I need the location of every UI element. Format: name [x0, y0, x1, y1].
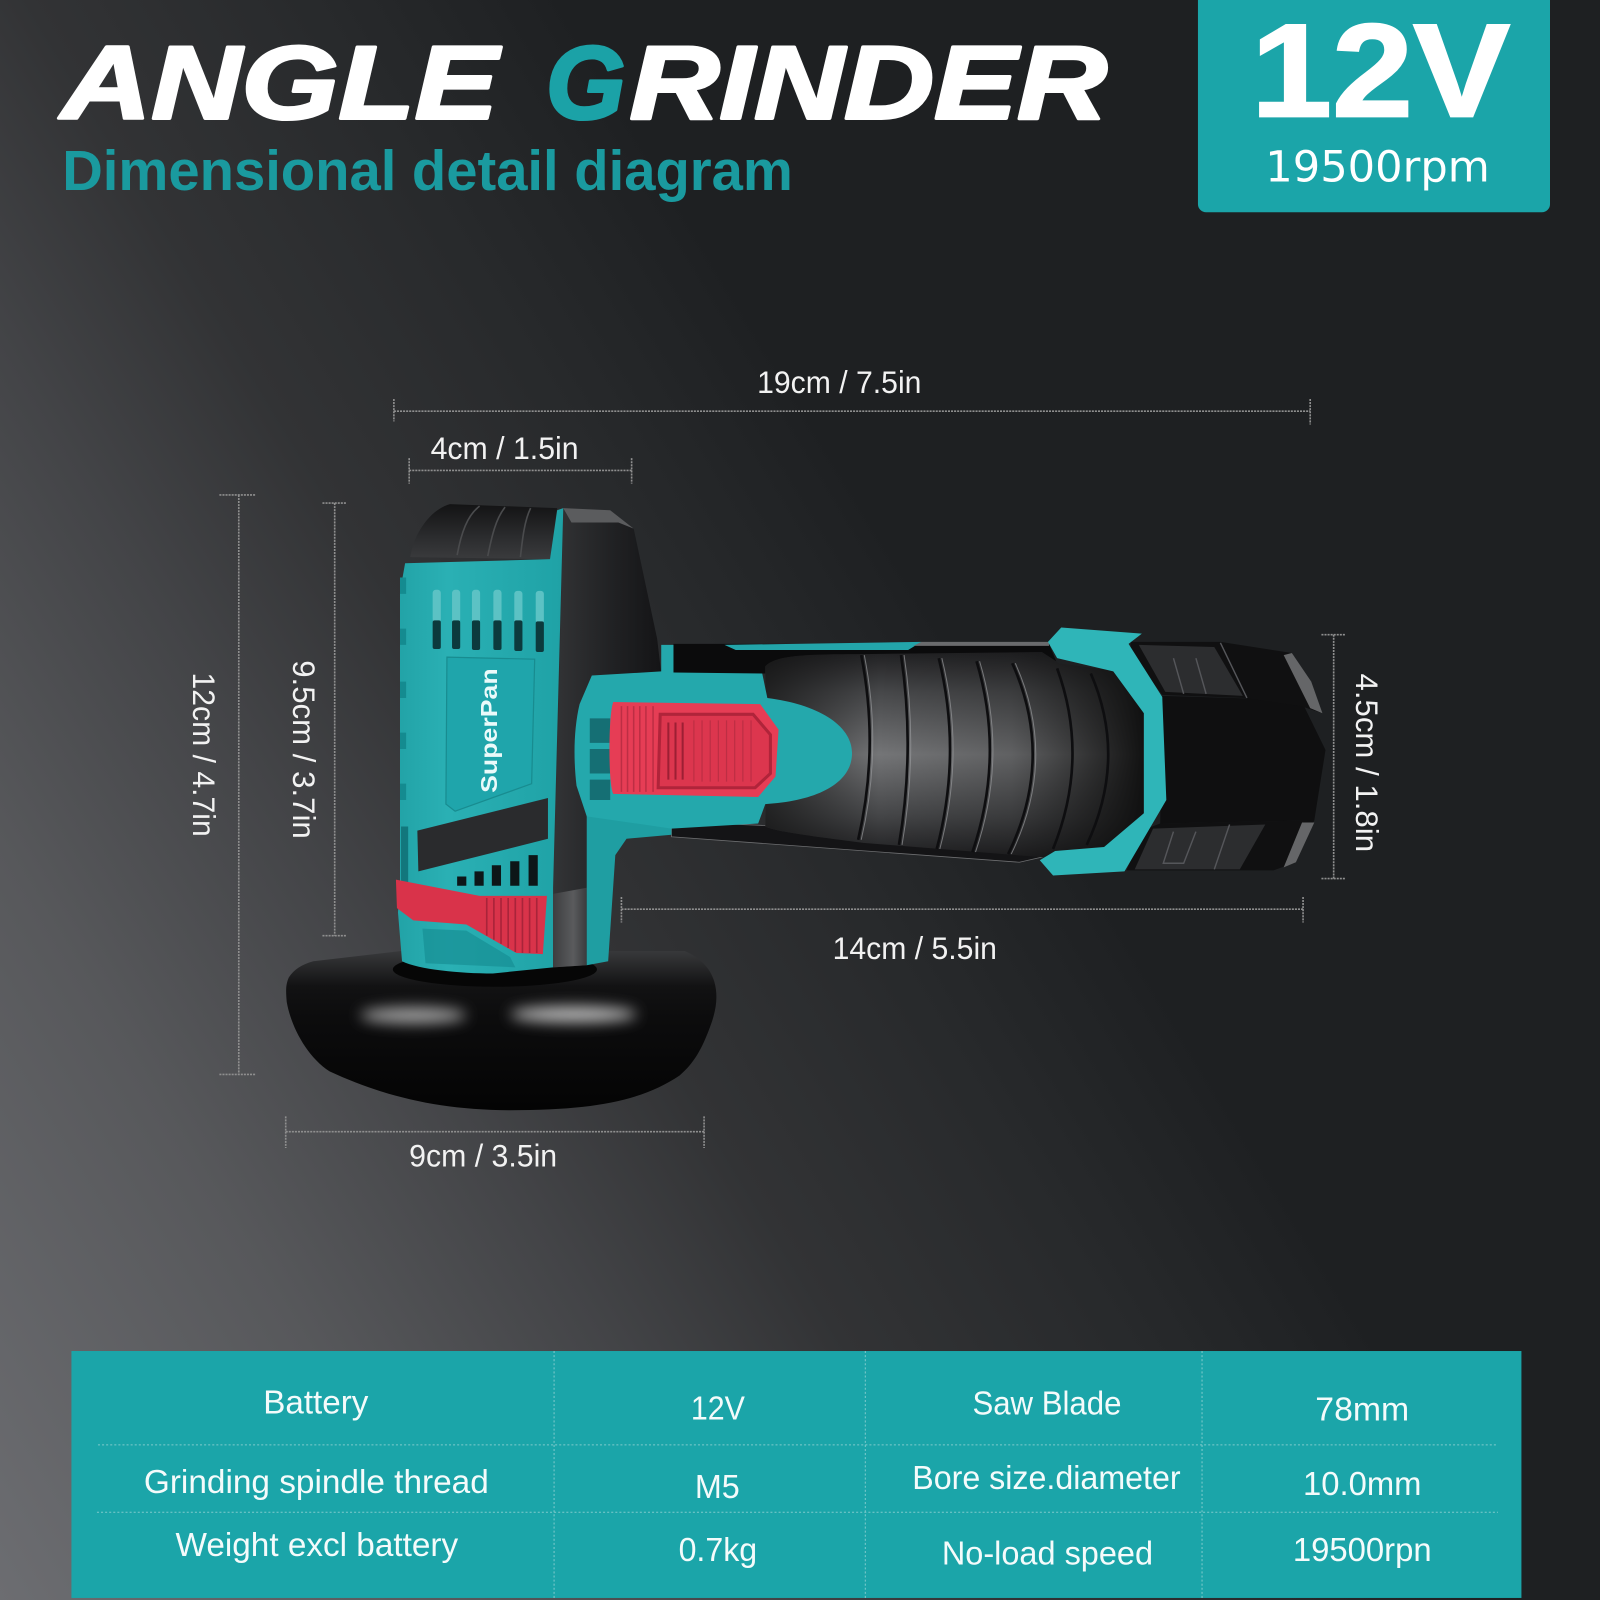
row: weight / no-load speed: 19500rpn — [1293, 1532, 1432, 1569]
row: battery / saw blade — [263, 1384, 1409, 1428]
lower vent slots — [457, 855, 538, 886]
dimension: handle length: 14cm / 5.5in — [833, 930, 997, 966]
dimension: head width — [409, 430, 632, 484]
dimension: handle length — [621, 897, 1303, 966]
dimension: total height — [186, 495, 256, 1074]
subtitle: Dimensional detail diagram — [62, 139, 793, 202]
row: weight / no-load speed: Weight excl battery — [176, 1527, 458, 1564]
upper handle strip — [673, 644, 1061, 673]
row: spindle thread / bore size: 10.0mm — [1303, 1466, 1421, 1503]
title — [58, 25, 1107, 141]
dark label band — [417, 798, 548, 871]
product: angle grinder — [286, 504, 1326, 1110]
dimension: total height: 12cm / 4.7in — [186, 672, 222, 837]
row: spindle thread / bore size: Bore size.diameter — [912, 1460, 1181, 1497]
title: G — [546, 25, 626, 141]
handle grip — [765, 652, 1144, 857]
dimension: overall length: 19cm / 7.5in — [757, 364, 921, 400]
dimension: head height — [286, 503, 346, 936]
row: spindle thread / bore size — [144, 1460, 1421, 1506]
dimension: overall length — [394, 364, 1310, 424]
row: spindle thread / bore size: Grinding spindle thread — [144, 1464, 489, 1501]
badge: 12V 19500rpm — [1198, 0, 1550, 212]
row: weight / no-load speed — [176, 1527, 1432, 1572]
top cap — [410, 504, 557, 559]
logo plate: SuperPan — [476, 668, 502, 793]
badge: 12V 19500rpm: 12V — [1251, 0, 1510, 145]
red lock band — [396, 880, 547, 954]
metal collar — [553, 888, 587, 967]
badge: 12V 19500rpm: 19500rpm — [1265, 143, 1490, 193]
dimension: head width: 4cm / 1.5in — [431, 430, 579, 466]
specification table — [71, 1351, 1521, 1598]
dimension: guard width — [286, 1116, 704, 1173]
dimension: head height: 9.5cm / 3.7in — [286, 660, 322, 839]
logo plate — [446, 657, 535, 811]
lower handle strip — [671, 821, 1042, 862]
title: ANGLE — [58, 25, 502, 141]
red slide switch — [609, 702, 779, 797]
row: battery / saw blade: Saw Blade — [972, 1385, 1121, 1422]
teal battery collar — [1040, 628, 1166, 876]
title: RINDER — [630, 25, 1107, 141]
wheel guard — [286, 951, 716, 1110]
row: spindle thread / bore size: M5 — [695, 1469, 740, 1506]
teal motor body — [396, 508, 563, 973]
dimension: battery height: 4.5cm / 1.8in — [1349, 673, 1385, 852]
switch housing — [575, 645, 852, 829]
row: battery / saw blade: Battery — [263, 1384, 369, 1421]
dimension: guard width: 9cm / 3.5in — [409, 1137, 557, 1173]
row: weight / no-load speed: 0.7kg — [679, 1532, 757, 1569]
teal neck — [587, 806, 671, 965]
row: weight / no-load speed: No-load speed — [942, 1535, 1153, 1572]
dimension: battery height — [1321, 635, 1385, 879]
row: battery / saw blade: 78mm — [1315, 1391, 1409, 1428]
upper vent slots — [433, 590, 544, 652]
row: battery / saw blade: 12V — [691, 1390, 745, 1427]
motor head rear shell — [553, 508, 661, 967]
battery — [1127, 642, 1326, 870]
